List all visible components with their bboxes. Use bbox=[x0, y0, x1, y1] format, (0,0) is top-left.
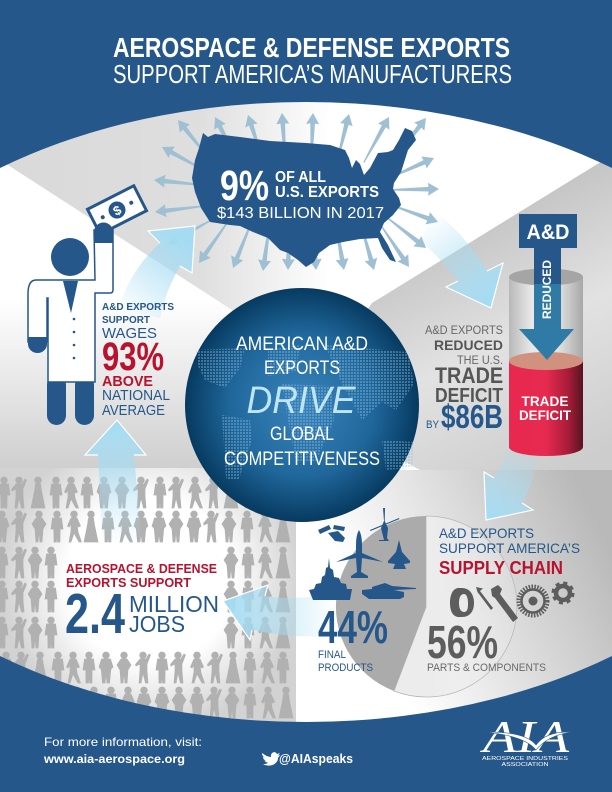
footer: twitter handle: @AIAspeaks bbox=[279, 752, 353, 766]
globe headline: DRIVE bbox=[246, 380, 356, 422]
title bbox=[113, 32, 512, 89]
central globe bbox=[185, 288, 420, 522]
text block: 2.4 million jobs bbox=[65, 562, 219, 646]
footer: contact information: For more information, visit: bbox=[44, 735, 202, 749]
icon: dollar bill: $ bbox=[111, 202, 125, 219]
text block: 2.4 million jobs: EXPORTS SUPPORT bbox=[66, 576, 191, 590]
globe headline bbox=[224, 334, 380, 470]
text block: wages: AVERAGE bbox=[102, 402, 165, 419]
text block: trade deficit reduced: $86B bbox=[441, 398, 503, 435]
map: United States bbox=[192, 128, 416, 267]
icon: helicopter bbox=[370, 508, 400, 541]
icon: warship bbox=[309, 558, 352, 600]
text block: trade deficit reduced: DEFICIT bbox=[435, 385, 503, 407]
dotted world map bbox=[190, 340, 420, 480]
text block: wages bbox=[102, 301, 174, 419]
title: SUPPORT AMERICA’S MANUFACTURERS bbox=[113, 61, 512, 89]
chart: supply chain pie bbox=[336, 516, 517, 697]
icon: worker in lab coat holding money bbox=[28, 186, 147, 425]
map callout: 9% of all U.S. exports: 9% bbox=[220, 162, 269, 210]
text block: wages: SUPPORT bbox=[102, 314, 151, 326]
logo: Aerospace Industries Association bbox=[479, 711, 572, 768]
footer: contact information bbox=[43, 735, 202, 766]
panel: top-left gray wedge bbox=[0, 90, 330, 412]
text block: trade deficit reduced: A&D EXPORTS bbox=[425, 325, 503, 337]
swoosh arrow: trade deficit to supply chain bbox=[484, 440, 542, 520]
logo: Aerospace Industries Association: ASSOCIATION bbox=[502, 762, 549, 768]
text block: trade deficit reduced: BY bbox=[426, 419, 440, 431]
globe headline: GLOBAL bbox=[270, 424, 334, 445]
icon: fighter jet bbox=[388, 540, 410, 569]
swoosh arrow: exports to trade deficit bbox=[420, 212, 503, 308]
stat: 44% final products: FINAL bbox=[318, 649, 346, 661]
stat: 56% parts and components: PARTS & COMPONENTS bbox=[427, 662, 546, 674]
swoosh arrow: jobs to wages bbox=[85, 420, 146, 545]
panel: lower right supply chain background bbox=[295, 470, 612, 730]
stat: 44% final products: PRODUCTS bbox=[318, 662, 373, 674]
icon: dollar bill bbox=[87, 186, 147, 234]
stat: 44% final products bbox=[318, 601, 388, 674]
globe headline: COMPETITIVENESS bbox=[224, 449, 380, 470]
map callout: 9% of all U.S. exports: U.S. EXPORTS bbox=[275, 184, 379, 201]
stat: 56% parts and components bbox=[427, 616, 546, 674]
stat: 56% parts and components: 56% bbox=[427, 616, 498, 668]
text block: 2.4 million jobs: JOBS bbox=[129, 611, 185, 637]
swoosh arrow: wages to exports bbox=[118, 226, 195, 318]
icon: cog bbox=[553, 583, 573, 603]
text block: wages: ABOVE bbox=[102, 373, 153, 390]
arrow: A&D reduced bbox=[519, 214, 577, 360]
text block: 2.4 million jobs: AEROSPACE & DEFENSE bbox=[66, 562, 217, 576]
icons: final products bbox=[309, 508, 416, 600]
globe headline: AMERICAN A&D bbox=[236, 334, 368, 355]
heading: supply chain bbox=[439, 525, 580, 578]
text block: trade deficit reduced: TRADE bbox=[435, 363, 503, 388]
label: trade deficit: DEFICIT bbox=[519, 407, 571, 423]
icon: tank bbox=[362, 583, 416, 599]
footer: contact information: www.aia-aerospace.org bbox=[43, 752, 185, 766]
map callout: 9% of all U.S. exports bbox=[217, 162, 384, 222]
arrow: A&D reduced: A&D bbox=[526, 221, 570, 244]
text block: wages: A&D EXPORTS bbox=[102, 301, 174, 313]
text block: wages: 93% bbox=[102, 335, 164, 379]
stat: 44% final products: 44% bbox=[318, 601, 388, 653]
icons: parts and components bbox=[450, 583, 573, 622]
globe headline: EXPORTS bbox=[264, 358, 340, 379]
logo: Aerospace Industries Association: AEROSPACE INDUSTRIES bbox=[482, 756, 568, 762]
logo: Aerospace Industries Association: AIA bbox=[479, 711, 570, 762]
heading: supply chain: SUPPLY CHAIN bbox=[439, 558, 563, 578]
map callout: 9% of all U.S. exports: $143 BILLION IN 2017 bbox=[217, 205, 384, 222]
text block: trade deficit reduced: REDUCED bbox=[434, 337, 503, 353]
panel: left wages background bbox=[0, 160, 302, 468]
text block: wages: NATIONAL bbox=[102, 387, 170, 404]
heading: supply chain: SUPPORT AMERICA’S bbox=[439, 540, 580, 556]
workforce silhouettes bbox=[0, 477, 293, 718]
chart: trade deficit cylinder bbox=[509, 214, 583, 456]
map callout: 9% of all U.S. exports: OF ALL bbox=[275, 169, 326, 186]
arrow: A&D reduced: REDUCED bbox=[540, 260, 554, 319]
icon: tire bbox=[450, 588, 474, 617]
icon: nail bbox=[476, 587, 493, 610]
text block: 2.4 million jobs: MILLION bbox=[129, 591, 219, 617]
swoosh arrow: supply chain to jobs bbox=[223, 585, 345, 640]
title: AEROSPACE & DEFENSE EXPORTS bbox=[113, 32, 510, 63]
label: trade deficit bbox=[519, 393, 571, 423]
heading: supply chain: A&D EXPORTS bbox=[439, 525, 534, 541]
label: trade deficit: TRADE bbox=[522, 393, 568, 409]
icon: satellite bbox=[318, 525, 345, 542]
panel: workforce background bbox=[0, 468, 296, 730]
icon: bolt bbox=[491, 585, 518, 622]
text block: wages: WAGES bbox=[102, 325, 157, 342]
text block: 2.4 million jobs: 2.4 bbox=[65, 582, 125, 646]
arrow rays from US map bbox=[153, 112, 440, 272]
panel: right trade deficit background bbox=[302, 155, 612, 470]
text block: trade deficit reduced: THE U.S. bbox=[457, 355, 503, 367]
icon: saw gear bbox=[519, 587, 547, 615]
text block: trade deficit reduced bbox=[425, 325, 503, 435]
icon: airliner bbox=[336, 530, 383, 578]
